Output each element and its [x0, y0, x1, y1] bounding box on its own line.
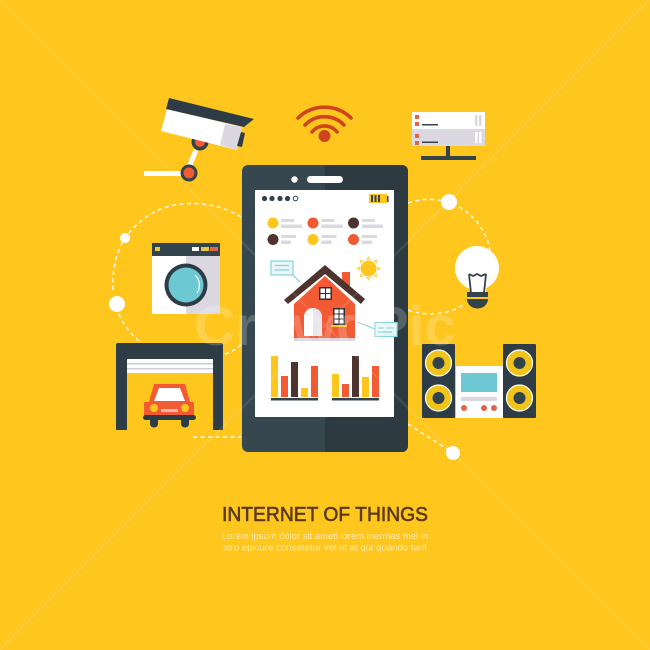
subtitle text: stro epicure consetetur vel ut at qui quando tant	[223, 542, 427, 554]
bar chart: right	[332, 356, 379, 400]
sensor status list	[268, 218, 383, 245]
icon: security camera	[144, 98, 254, 182]
smartphone	[242, 165, 408, 452]
title: INTERNET OF THINGS	[222, 504, 428, 526]
icon: washing machine	[152, 243, 220, 314]
subtitle text: Lorem ipsum dolor sit ameti lorem inermas mel in	[222, 531, 428, 542]
connector node dots	[109, 194, 460, 460]
icon: stereo system	[422, 344, 536, 418]
car	[143, 384, 196, 428]
phone screen	[255, 190, 394, 417]
bar chart: left	[271, 356, 318, 400]
callout: top left	[271, 261, 300, 282]
status bar	[262, 194, 388, 203]
icon: garage with car	[116, 343, 223, 430]
house	[284, 265, 365, 341]
icon: wifi signal	[298, 107, 351, 142]
icon: sun	[356, 256, 381, 281]
icon: server	[412, 112, 485, 160]
watermark text: CrowdPic	[194, 294, 456, 357]
callout: bottom right	[357, 322, 397, 336]
dashed connector paths	[113, 199, 490, 449]
subtitle text	[222, 531, 428, 554]
icon: light bulb	[455, 246, 499, 309]
